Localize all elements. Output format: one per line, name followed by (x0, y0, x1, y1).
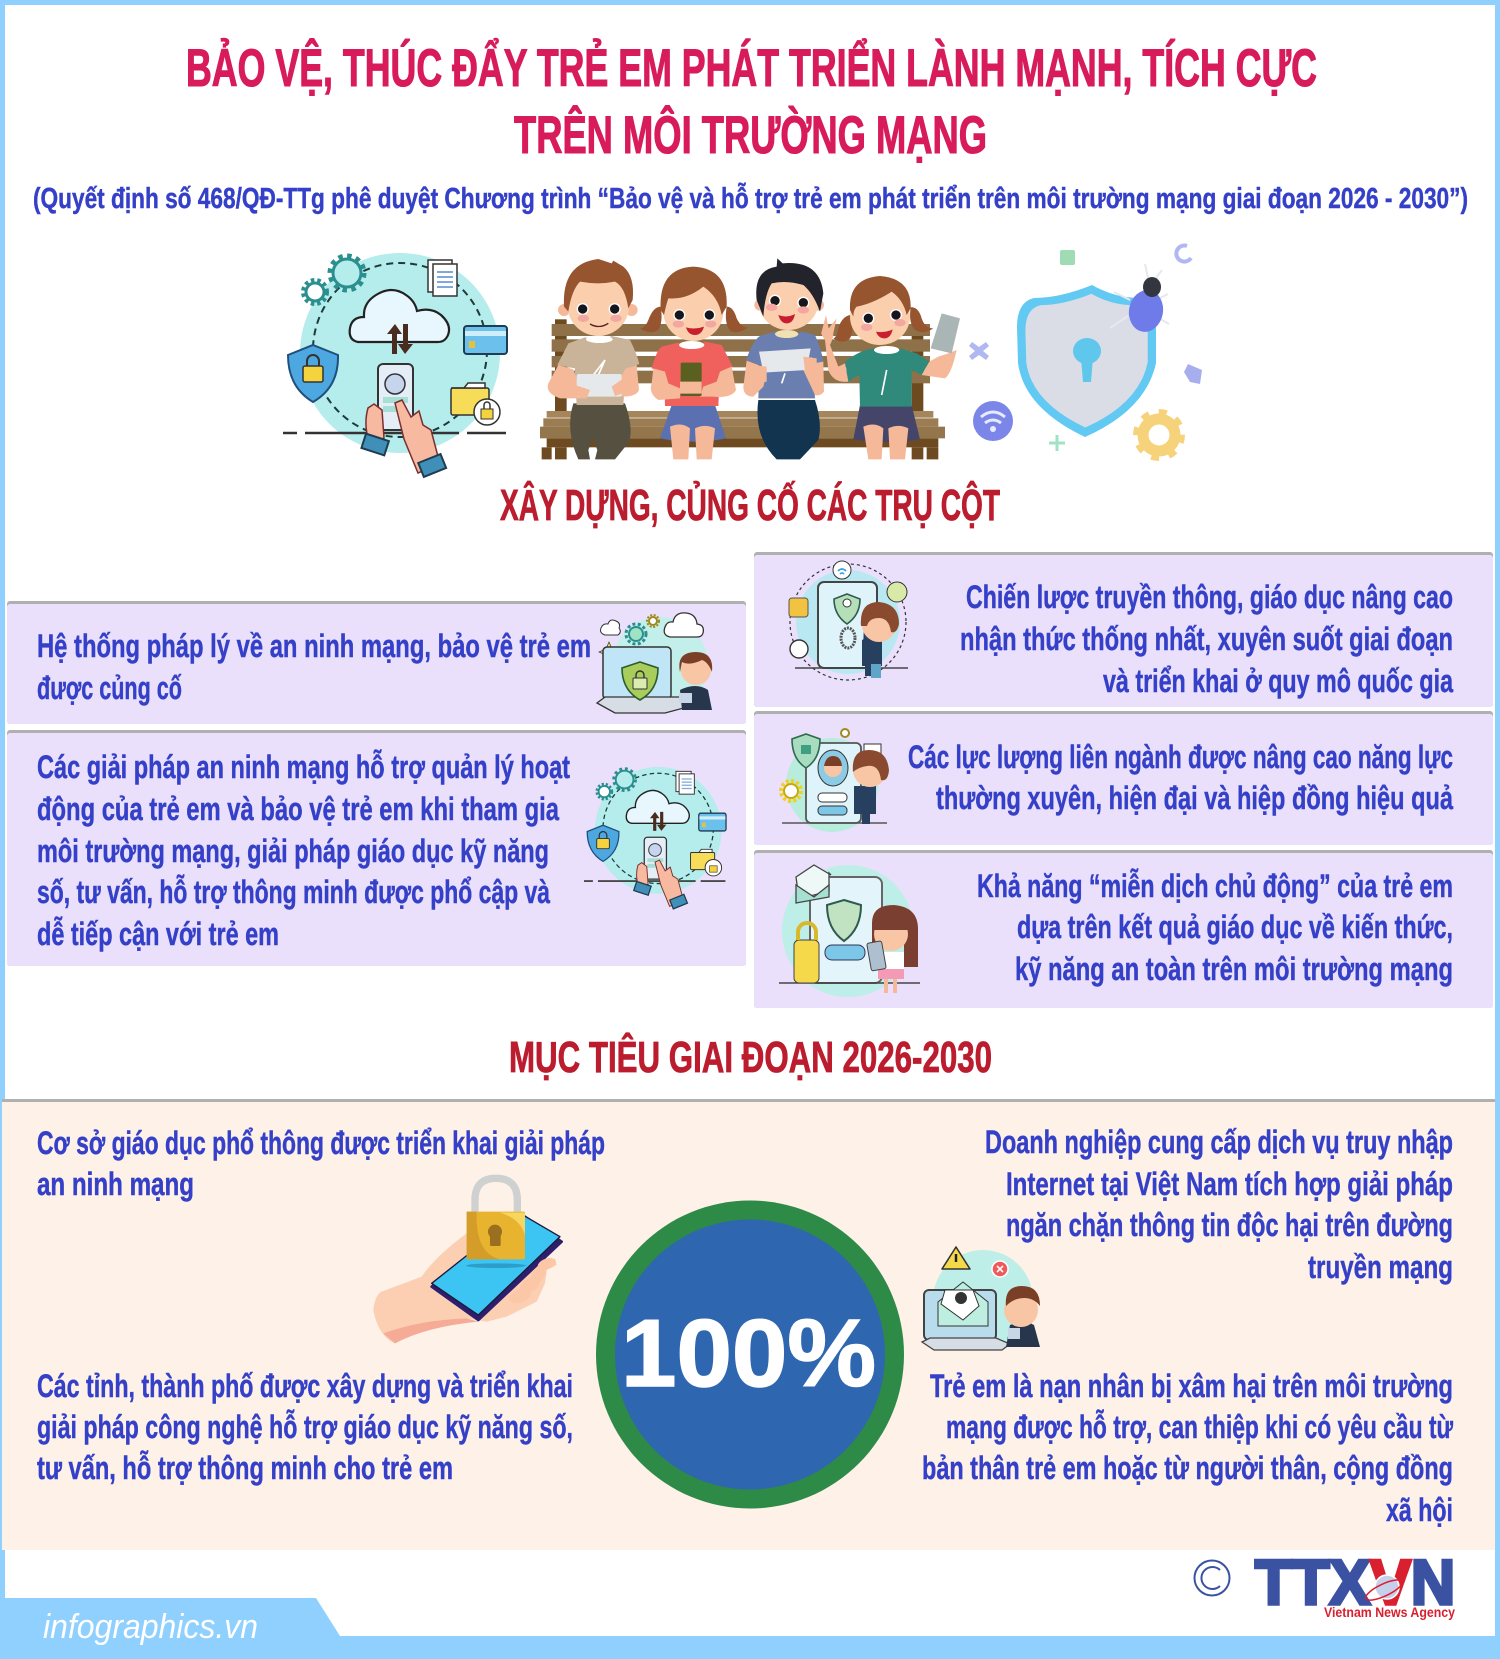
panel text: Hệ thống pháp lý về an ninh mạng, bảo vệ trẻ em (37, 628, 591, 664)
title (186, 37, 1317, 165)
goal text: child victims: xã hội (1386, 1492, 1453, 1528)
goal text: provinces: Các tỉnh, thành phố được xây dựng và triển khai (37, 1368, 573, 1404)
logo: TTXVN: Vietnam News Agency (1324, 1604, 1455, 1620)
illustration: shield with bug and floating shapes (969, 246, 1202, 458)
panel: communication strategy (754, 552, 1493, 707)
goal text: child victims (922, 1368, 1454, 1528)
icon: phone with fingerprint (789, 561, 908, 680)
goal text: internet providers: truyền mạng (1308, 1249, 1453, 1285)
panel text: dễ tiếp cận với trẻ em (37, 916, 279, 952)
goal text: schools: Cơ sở giáo dục phổ thông được triển khai giải pháp (37, 1125, 605, 1161)
icon: hand holding locked phone (373, 1178, 562, 1343)
goal text: provinces: giải pháp công nghệ hỗ trợ giáo dục kỹ năng số, (37, 1409, 573, 1445)
title: TRÊN MÔI TRƯỜNG MẠNG (514, 104, 987, 165)
child 1 (548, 259, 639, 459)
chart: 100 percent circle: 100% (621, 1300, 876, 1407)
heading: goals: MỤC TIÊU GIAI ĐOẠN 2026-2030 (509, 1032, 992, 1082)
illustration: four children on a bench (540, 258, 960, 459)
goal text: provinces: tư vấn, hỗ trợ thông minh cho trẻ em (37, 1450, 453, 1486)
logo: TTXVN: TTXVN (1255, 1548, 1455, 1618)
icon: cloud and phone network (584, 767, 726, 909)
icon: phone with login (781, 729, 889, 832)
goal text: schools: an ninh mạng (37, 1166, 194, 1202)
panel: 2026-2030 goals (2, 1099, 1495, 1550)
panel: cross-sector forces (754, 711, 1493, 845)
goal text: provinces (37, 1368, 573, 1486)
panel text: Các giải pháp an ninh mạng hỗ trợ quản lý hoạt (37, 749, 570, 785)
panel text (37, 749, 570, 952)
panel text (908, 739, 1453, 816)
panel text: được củng cố (37, 670, 182, 706)
panel text: động của trẻ em và bảo vệ trẻ em khi tham gia (37, 791, 559, 827)
icon: phone, lock and girl (779, 865, 920, 997)
icon: laptop with shield (597, 613, 712, 713)
child 4 (821, 276, 960, 459)
panel: cybersecurity solutions (7, 730, 746, 966)
goal text: schools (37, 1125, 605, 1202)
panel text: số, tư vấn, hỗ trợ thông minh được phổ cập và (37, 874, 550, 910)
panel text (37, 628, 591, 706)
bench (540, 319, 945, 459)
footer source: infographics.vn (43, 1608, 258, 1646)
illustration: cloud and phone network (283, 253, 507, 477)
child 3 (743, 258, 824, 459)
panel text: môi trường mạng, giải pháp giáo dục kỹ năng (37, 833, 549, 869)
child 2 (640, 267, 748, 459)
footer band (0, 1598, 1500, 1659)
panel text (960, 579, 1453, 699)
heading: pillars: XÂY DỰNG, CỦNG CỐ CÁC TRỤ CỘT (500, 479, 1000, 530)
chart: 100 percent circle (596, 1200, 904, 1508)
panel: active immunity (754, 850, 1493, 1008)
panel text (977, 868, 1453, 987)
icon: malicious email on laptop (922, 1247, 1040, 1350)
goal text: internet providers (985, 1124, 1453, 1285)
panel: legal system (7, 601, 746, 724)
